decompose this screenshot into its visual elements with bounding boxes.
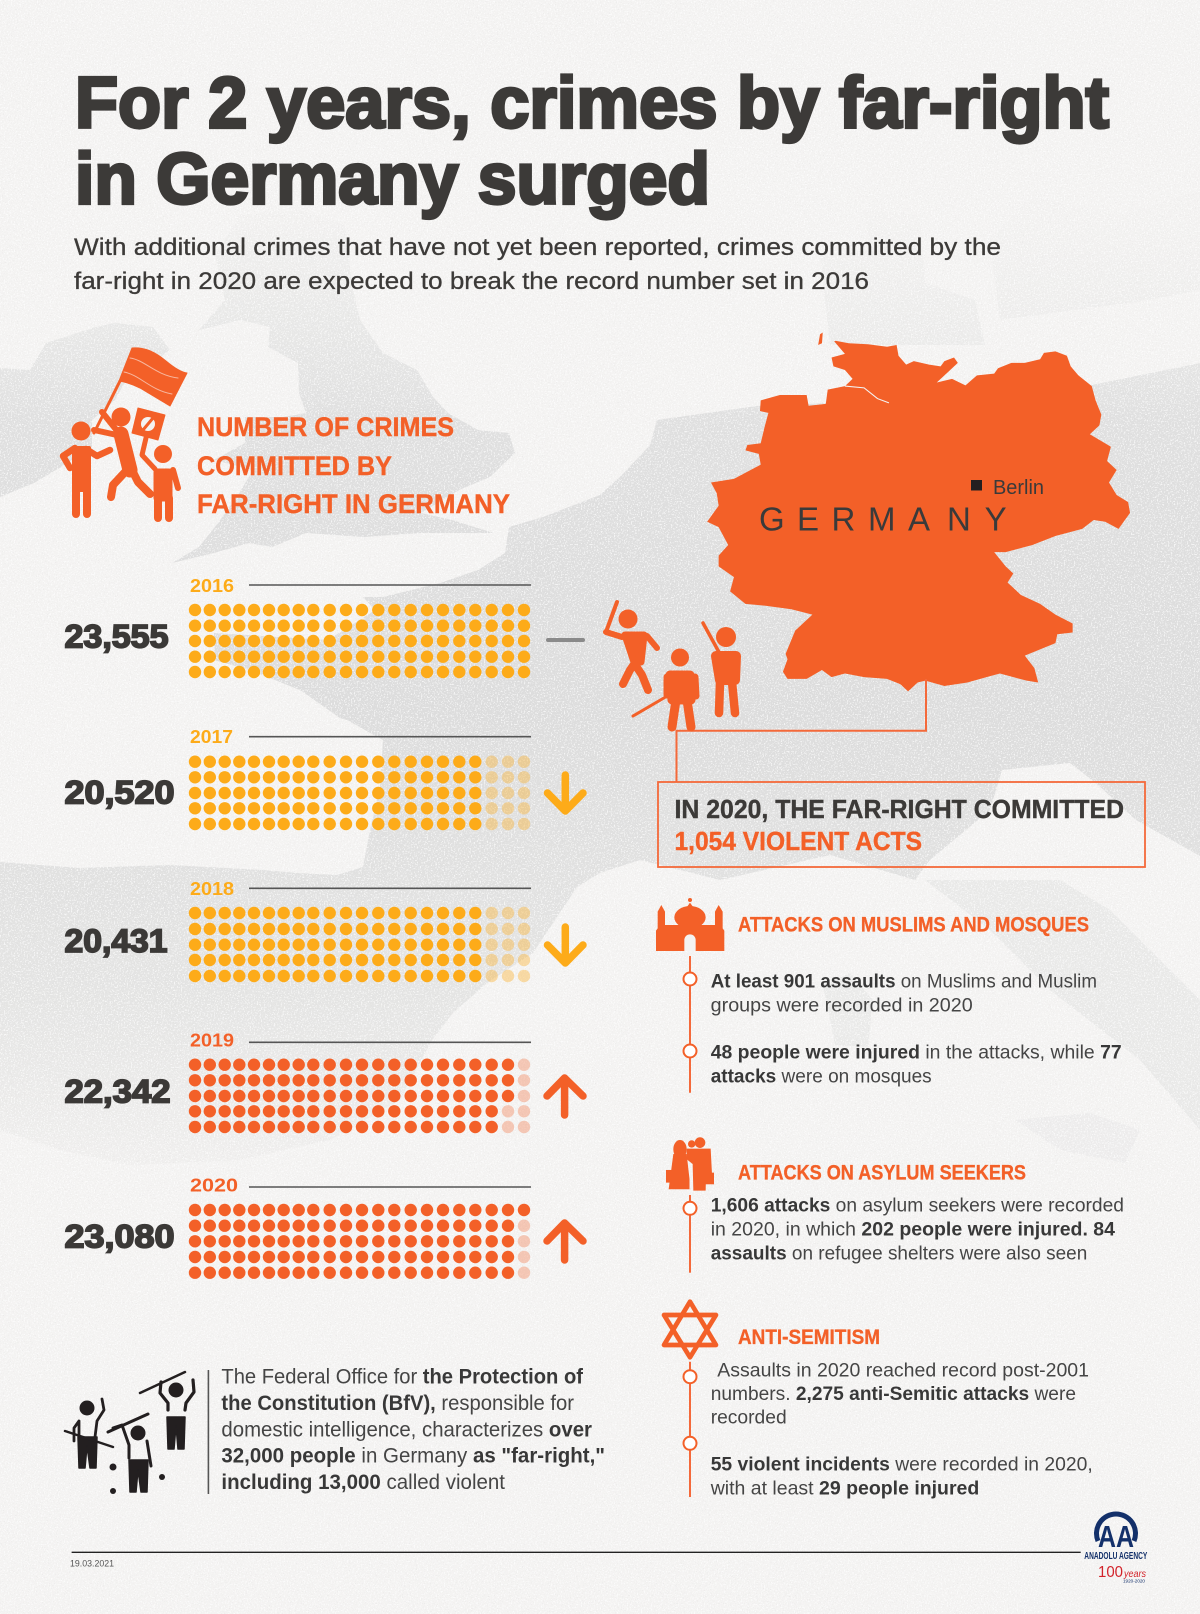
heading: number of crimes: FAR-RIGHT IN GERMANY (197, 489, 510, 519)
heading: number of crimes: COMMITTED BY (197, 451, 392, 481)
heading: ATTACKS ON MUSLIMS AND MOSQUES (738, 914, 1089, 937)
row: 2020 (64, 1176, 583, 1279)
heading: ATTACKS ON ASYLUM SEEKERS (738, 1161, 1026, 1184)
row: 2018: 20,431 (64, 923, 168, 959)
row: 2017: 20,520 (64, 774, 174, 810)
text block: numbers. 2,275 anti-Semitic attacks were (711, 1383, 1076, 1405)
label: Berlin: Berlin (993, 477, 1044, 499)
text block: Assaults in 2020 reached record post-2001 (717, 1360, 1089, 1382)
subtitle: With additional crimes that have not yet been reported, crimes committed by the (74, 234, 1001, 261)
row: 2018 (64, 879, 583, 982)
callout: 1,054 violent acts: IN 2020, THE FAR-RIGHT COMMITTED (674, 794, 1124, 824)
logo: Anadolu Agency: 1920-2020 (1123, 1579, 1145, 1584)
subtitle (74, 234, 1001, 295)
timeline (684, 1195, 696, 1273)
heading: number of crimes: NUMBER OF CRIMES (197, 412, 454, 442)
text block: assaults on refugee shelters were also seen (711, 1242, 1087, 1264)
title (75, 64, 1109, 220)
timeline (684, 956, 696, 1093)
text block: recorded (711, 1406, 787, 1428)
row: 2016: 2016 (190, 576, 234, 596)
logo: Anadolu Agency (1084, 1514, 1147, 1584)
row: 2019: 2019 (190, 1031, 234, 1051)
text block: 55 violent incidents were recorded in 2020, (711, 1454, 1093, 1476)
text block: attacks were on mosques (711, 1065, 932, 1087)
row: 2019: 22,342 (64, 1074, 170, 1110)
callout: 1,054 violent acts (658, 782, 1145, 867)
icon: mosque (656, 898, 724, 951)
section: attacks on Muslims and mosques (656, 898, 1122, 1093)
connector line (676, 679, 926, 782)
row: 2016 (64, 576, 585, 678)
text block: Federal Office: domestic intelligence, characterizes over (221, 1419, 592, 1442)
logo: Anadolu Agency: AA (1098, 1519, 1134, 1554)
timeline (684, 1362, 696, 1497)
text block: 1,606 attacks on asylum seekers were recorded (711, 1195, 1124, 1217)
icon: armed militants (65, 1372, 194, 1494)
row: 2018: 2018 (190, 879, 234, 899)
logo: Anadolu Agency: years (1123, 1568, 1147, 1580)
footer rule and date: 19.03.2021 (70, 1559, 114, 1570)
heading: number of crimes (197, 412, 510, 519)
heading: ANTI-SEMITISM (738, 1326, 880, 1349)
icon: violent far-right figures (606, 602, 736, 727)
row: 2020: 23,080 (64, 1218, 174, 1254)
text block: 48 people were injured in the attacks, while 77 (711, 1041, 1122, 1063)
icon: protesters with flag (63, 348, 187, 518)
logo: Anadolu Agency: 100 (1098, 1564, 1123, 1581)
text block: Federal Office: The Federal Office for the Protection of (221, 1365, 584, 1388)
text block: in 2020, in which 202 people were injured. 84 (711, 1219, 1115, 1241)
row: 2017 (64, 727, 583, 830)
row: 2016: 23,555 (64, 618, 168, 654)
icon: refugee family (666, 1137, 714, 1191)
text block: Federal Office: including 13,000 called violent (221, 1471, 505, 1494)
text block: Federal Office: the Constitution (BfV), responsible for (221, 1392, 574, 1415)
label: Germany: GERMANY (759, 501, 1007, 538)
title: in Germany surged (75, 140, 710, 220)
background map of Europe (0, 190, 1200, 1165)
subtitle: far-right in 2020 are expected to break the record number set in 2016 (74, 268, 869, 295)
map: Germany (707, 332, 1130, 691)
text block: groups were recorded in 2020 (711, 995, 973, 1017)
row: 2017: 2017 (190, 727, 233, 747)
text block: with at least 29 people injured (710, 1477, 979, 1499)
row: 2020: 2020 (190, 1176, 238, 1196)
row: 2019 (64, 1031, 583, 1133)
title: For 2 years, crimes by far-right (75, 64, 1109, 144)
callout: 1,054 violent acts: 1,054 VIOLENT ACTS (674, 826, 922, 856)
logo: Anadolu Agency: ANADOLU AGENCY (1084, 1550, 1147, 1562)
label: Berlin (971, 477, 1044, 499)
icon: star of David (664, 1302, 716, 1357)
section: anti-Semitism (664, 1302, 1093, 1499)
section: attacks on asylum seekers (666, 1137, 1124, 1273)
text block (711, 1195, 1124, 1264)
text block (711, 971, 1122, 1087)
text block (710, 1360, 1093, 1499)
text block: At least 901 assaults on Muslims and Muslim (711, 971, 1097, 993)
text block: Federal Office: 32,000 people in Germany as "far-right," (221, 1445, 605, 1468)
text block: Federal Office (208, 1365, 605, 1494)
